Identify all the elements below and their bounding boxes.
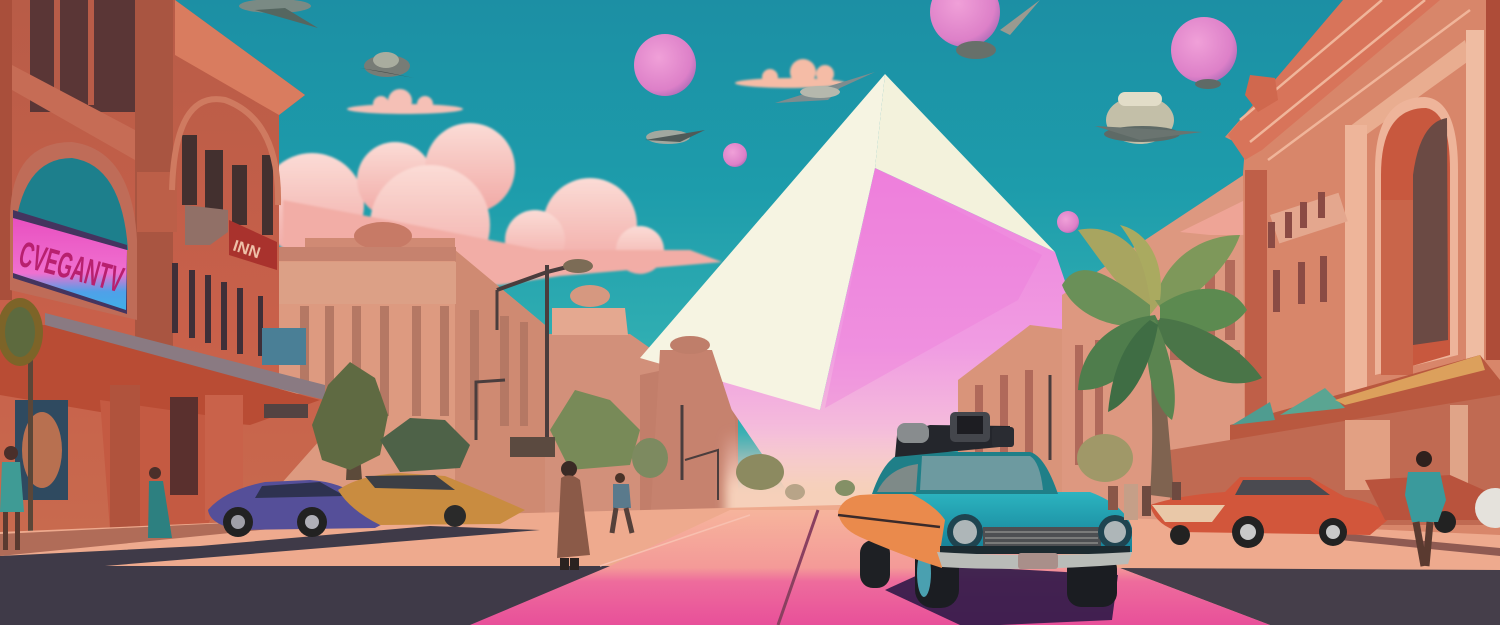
car: gold	[338, 473, 525, 527]
under grille	[940, 546, 1130, 554]
ship: small centre	[645, 130, 705, 144]
roof cargo camera	[895, 412, 1014, 457]
ship: jet	[775, 72, 875, 103]
left building	[0, 0, 325, 532]
cloud: large pink cumulus	[260, 123, 722, 290]
person: teal robe left	[148, 467, 172, 538]
cloud: small centre	[735, 59, 845, 88]
flying ships	[239, 0, 1221, 144]
pyramid	[640, 74, 1068, 495]
kerb line left	[0, 518, 340, 556]
window mural	[15, 400, 68, 500]
road centre line	[778, 510, 818, 625]
pavement right	[1120, 568, 1500, 625]
shop signs	[229, 220, 277, 270]
ship: large right	[1095, 92, 1202, 144]
body orange side	[838, 492, 950, 568]
ship: under right sphere	[1195, 79, 1221, 89]
car: purple	[208, 480, 400, 537]
right buildings	[958, 0, 1500, 540]
shop signs: INN	[231, 238, 262, 262]
background building: small dome before pyramid	[650, 336, 738, 525]
pink road	[470, 510, 1270, 625]
grille	[983, 527, 1101, 547]
ship: top left	[239, 0, 318, 28]
ship: saucer left	[360, 52, 414, 78]
dark sign	[264, 404, 308, 418]
wheels	[860, 538, 1117, 608]
palms left	[312, 362, 1133, 500]
neon sign text: CVEGANTV	[15, 233, 128, 300]
horizon haze	[725, 430, 915, 525]
person: walking centre	[612, 473, 632, 533]
street lamps	[476, 259, 1050, 500]
person: teal shirt right	[1405, 451, 1446, 566]
people: distant crowd right	[1108, 482, 1181, 520]
distant cars	[208, 473, 1500, 548]
people	[0, 446, 1446, 570]
blue sign	[262, 328, 306, 365]
planet: pink spheres	[634, 0, 1237, 233]
car: foreground orange and blue	[838, 412, 1132, 625]
hood blue	[908, 492, 1132, 552]
kerb right	[1340, 533, 1500, 556]
background building: centre left domed hall	[278, 222, 738, 525]
ship: under sphere	[956, 0, 1040, 59]
cloud: small left	[347, 89, 463, 114]
car: far right	[1365, 475, 1500, 533]
neon sign arch	[10, 142, 137, 320]
sidewalk	[0, 505, 1500, 625]
pavement shadows left	[0, 526, 615, 625]
round sign on pole	[0, 298, 43, 545]
roof and windows	[872, 452, 1058, 494]
person: coat centre	[557, 461, 590, 570]
headlights	[947, 514, 1132, 550]
bumper	[937, 552, 1132, 569]
palm tree: right	[1062, 225, 1262, 498]
person: woman in teal far left	[0, 446, 24, 550]
car: red right	[1150, 477, 1390, 548]
